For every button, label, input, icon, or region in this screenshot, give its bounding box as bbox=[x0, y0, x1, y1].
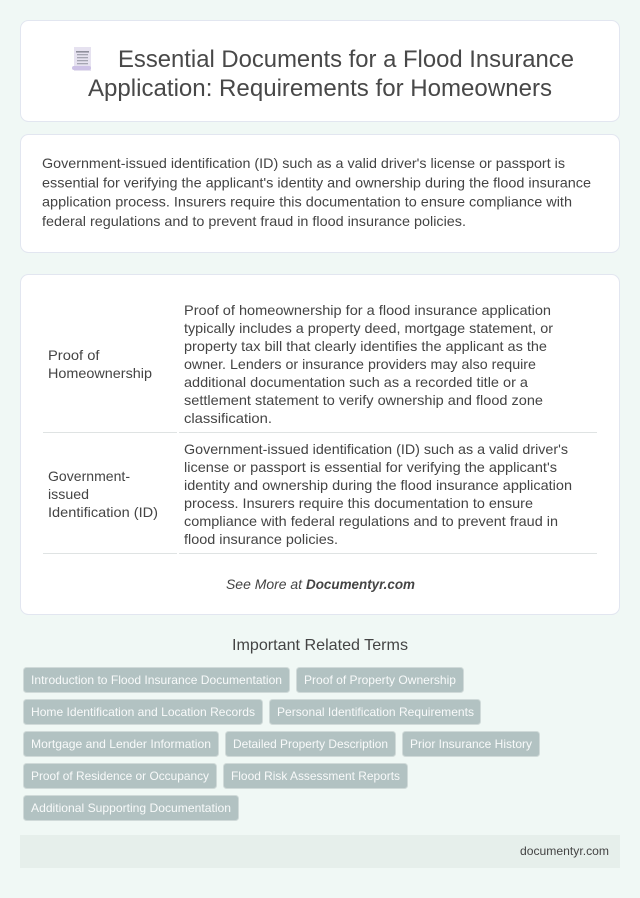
see more link: Documentyr.com bbox=[306, 576, 415, 592]
footer site name: documentyr.com bbox=[520, 844, 609, 858]
heading text bbox=[88, 46, 574, 102]
chip: Home Identification and Location Records bbox=[31, 705, 255, 719]
table row: proof of homeownership: Homeownership bbox=[48, 365, 152, 381]
chip bbox=[24, 796, 238, 820]
heading text: Application: Requirements for Homeowners bbox=[88, 75, 552, 102]
heading: important related terms: Important Related Terms bbox=[232, 637, 408, 654]
table row: government-issued id: identity and ownership during the flood insurance application bbox=[184, 477, 572, 493]
table row: government-issued id: compliance with federal regulations and to prevent fraud in bbox=[184, 513, 558, 529]
summary text bbox=[42, 155, 591, 229]
see more link: See More at bbox=[226, 576, 303, 592]
heading text: Essential Documents for a Flood Insurance bbox=[118, 46, 574, 73]
table row: government-issued id: flood insurance policies. bbox=[184, 531, 338, 547]
see more link bbox=[226, 576, 415, 592]
icon: document scroll bbox=[72, 47, 91, 71]
table row: proof of homeownership: classification. bbox=[184, 410, 272, 426]
chip bbox=[24, 668, 290, 692]
chip bbox=[224, 764, 408, 788]
panel: documents table bbox=[20, 274, 620, 614]
table row: proof of homeownership: settlement statement to verify ownership and flood zone bbox=[184, 392, 543, 408]
table row: proof of homeownership bbox=[48, 302, 553, 426]
chip: Personal Identification Requirements bbox=[277, 705, 474, 719]
table row: government-issued id: Government- bbox=[48, 468, 130, 484]
table row: proof of homeownership: typically includes a property deed, mortgage statement, or bbox=[184, 320, 553, 336]
chip: Introduction to Flood Insurance Documentation bbox=[31, 673, 282, 687]
panel: title header bbox=[20, 20, 620, 122]
chip bbox=[402, 732, 540, 756]
chip: Prior Insurance History bbox=[410, 737, 532, 751]
chip: Flood Risk Assessment Reports bbox=[231, 769, 400, 783]
summary text: application process. Insurers require this documentation to ensure compliance with bbox=[42, 194, 572, 210]
table row: government-issued id bbox=[48, 441, 572, 547]
table row: government-issued id: issued bbox=[48, 486, 89, 502]
table row: government-issued id: process. Insurers require this documentation to ensure bbox=[184, 495, 533, 511]
chip: Mortgage and Lender Information bbox=[31, 737, 211, 751]
panel: summary bbox=[20, 134, 620, 252]
chip: Detailed Property Description bbox=[233, 737, 388, 751]
footer bbox=[20, 835, 620, 868]
table row: government-issued id: Identification (ID) bbox=[48, 504, 158, 520]
summary text: essential for verifying the applicant's identity and ownership during the flood insurance bbox=[42, 174, 591, 190]
summary text: Government-issued identification (ID) such as a valid driver's license or passport is bbox=[42, 155, 565, 171]
chip bbox=[24, 700, 262, 724]
chip bbox=[24, 764, 216, 788]
table row: proof of homeownership: owner. Lenders or insurance providers may also require bbox=[184, 356, 536, 372]
chip bbox=[270, 700, 480, 724]
chip: Additional Supporting Documentation bbox=[31, 801, 231, 815]
table row: proof of homeownership: Proof of homeownership for a flood insurance application bbox=[184, 302, 551, 318]
chip bbox=[296, 668, 464, 692]
table row: proof of homeownership: property tax bill that clearly identifies the applicant as the bbox=[184, 338, 547, 354]
table row: proof of homeownership: additional documentation such as a recorded title or a bbox=[184, 374, 528, 390]
chip: Proof of Residence or Occupancy bbox=[31, 769, 209, 783]
table row: proof of homeownership: Proof of bbox=[48, 347, 100, 363]
table row: government-issued id: license or passport is essential for verifying the applicant's bbox=[184, 459, 557, 475]
chip bbox=[24, 732, 218, 756]
related terms chips bbox=[24, 668, 540, 820]
table row: government-issued id: Government-issued identification (ID) such as a valid driver's bbox=[184, 441, 568, 457]
chip: Proof of Property Ownership bbox=[304, 673, 456, 687]
summary text: federal regulations and to prevent fraud in flood insurance policies. bbox=[42, 213, 466, 229]
chip bbox=[226, 732, 396, 756]
